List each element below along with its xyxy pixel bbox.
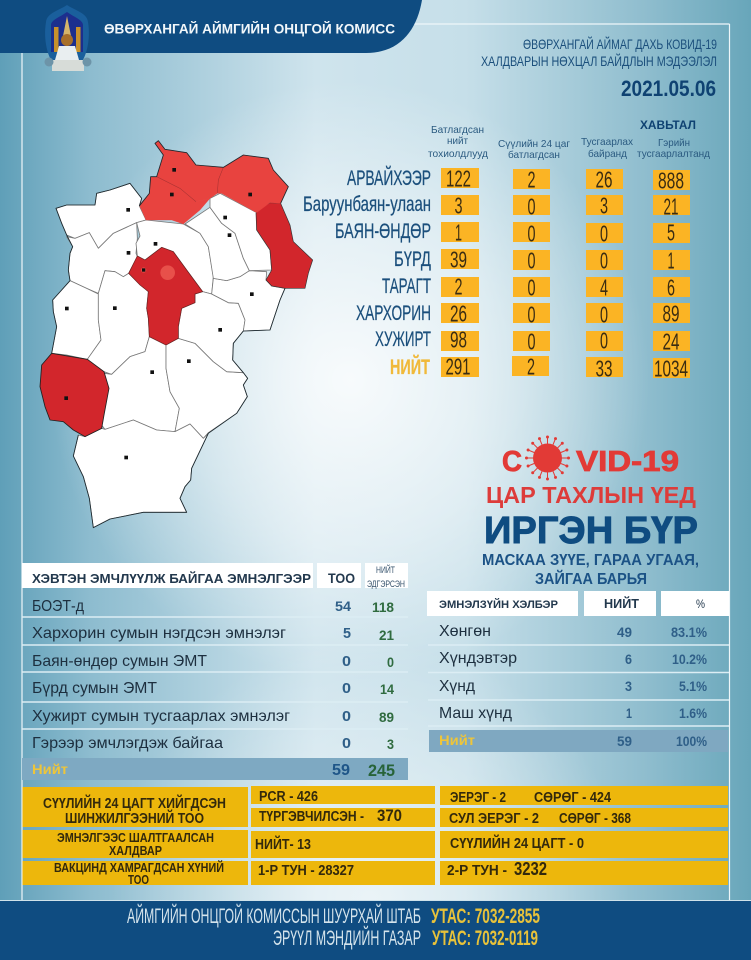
row: vaccination [22, 859, 728, 887]
row: Arvaikheer: 26 [596, 166, 612, 192]
header banner [0, 0, 422, 71]
row: Khujirt isolation hospital: 0 [342, 708, 351, 725]
slogan text: МАСКАА ЗҮҮЕ, ГАРАА УГААЯ, [482, 552, 699, 569]
row: Bayan-Ondor: 0 [600, 220, 608, 246]
row: home treatment: 0 [342, 735, 351, 752]
row: moderate: 10.2% [672, 651, 707, 667]
banner title: ӨВӨРХАНГАЙ АЙМГИЙН ОНЦГОЙ КОМИСС [104, 22, 395, 36]
column headers: батлагдсан [508, 149, 560, 161]
outer border [52, 141, 288, 528]
icon: provincial emblem [44, 5, 92, 71]
contact: health department: ЭРҮҮЛ МЭНДИЙН ГАЗАР [273, 926, 421, 950]
row: Khujirt: 0 [528, 328, 536, 354]
panel: soum case table [303, 120, 710, 382]
table header: ЭМНЭЛЗҮЙН ХЭЛБЭР [439, 598, 558, 611]
row: Kharkhorin hospital: 5 [343, 625, 351, 642]
row: severe: Хүнд [439, 678, 476, 695]
row: Taragt: 2 [454, 274, 462, 300]
column headers: Тусгаарлах [581, 136, 634, 148]
contact: health department: УТАС: 7032-0119 [432, 927, 538, 950]
row: total [390, 354, 690, 382]
row: vaccination: ТОО [128, 872, 149, 887]
row: Kharkhorin: 0 [528, 302, 536, 328]
row: severe: 5.1% [679, 678, 707, 694]
row: Bayan-Ondor: 1 [455, 220, 462, 246]
table header [22, 563, 408, 589]
row: mild: 83.1% [671, 624, 707, 640]
row: vaccination: ВАКЦИНД ХАМРАГДСАН ХҮНИЙ [54, 860, 224, 875]
row: BOET: БОЭТ-д [32, 598, 85, 615]
heading: COVID-19: VID-19 [576, 446, 679, 478]
column headers: Гэрийн [658, 137, 690, 149]
row: hospital-acquired infection [22, 830, 728, 858]
heading: during the pandemic: ЦАР ТАХЛЫН ҮЕД [486, 482, 696, 508]
column headers: Сүүлийн 24 цаг [498, 138, 570, 150]
row: Bayan-Ondor health centre [32, 653, 394, 670]
table header [427, 591, 729, 616]
column headers [428, 120, 710, 161]
row: tests in 24 hours [22, 786, 728, 827]
covid slogan [482, 437, 699, 588]
column headers: тохиолдлууд [428, 148, 488, 160]
row: tests in 24 hours: 370 [377, 806, 402, 825]
row: Baruunbayan-ulaan [303, 192, 690, 220]
row: BOET [32, 598, 394, 615]
soum centre markers [64, 168, 254, 459]
row: Burd health centre [32, 680, 394, 697]
row: very severe: 1 [626, 705, 632, 721]
row: Arvaikheer: 888 [658, 168, 684, 194]
row: total: 291 [446, 354, 470, 380]
row: vaccination: 1-Р ТУН - 28327 [258, 863, 354, 879]
heading: COVID-19 [502, 437, 679, 479]
row: total: Нийт [439, 732, 475, 748]
row: Burd: 0 [600, 248, 608, 274]
row: Baruunbayan-ulaan: 3 [600, 192, 608, 218]
row: Burd health centre: Бүрд сумын ЭМТ [32, 680, 157, 697]
row: Taragt: 6 [667, 274, 675, 300]
row: Taragt: 0 [528, 274, 536, 300]
row: tests in 24 hours: PCR - 426 [259, 789, 318, 805]
row: Taragt: ТАРАГТ [382, 275, 431, 298]
row: Khujirt: 24 [662, 328, 680, 354]
row: Bayan-Ondor health centre: Баян-өндөр сумын ЭМТ [32, 653, 207, 670]
row: Baruunbayan-ulaan: 0 [528, 194, 536, 220]
row: Kharkhorin hospital [32, 625, 394, 643]
row: Kharkhorin hospital: Хархорин сумын нэгдсэн эмнэлэг [32, 625, 286, 642]
row: Burd [394, 246, 690, 274]
row: tests in 24 hours: СУЛ ЭЕРЭГ - 2 [449, 811, 539, 827]
row: moderate: Хүндэвтэр [439, 650, 517, 667]
contact: emergency headquarters: УТАС: 7032-2855 [431, 905, 540, 928]
column headers: Батлагдсан [431, 124, 484, 136]
slogan text [482, 552, 699, 588]
row: Baruunbayan-ulaan: 21 [664, 194, 678, 220]
row: home treatment [32, 735, 394, 752]
row: Khujirt isolation hospital: Хужирт сумын тусгаарлах эмнэлэг [32, 708, 290, 725]
row: Arvaikheer: 2 [528, 166, 536, 192]
row: hospital-acquired infection: ЭМНЭЛГЭЭС ШАЛТГААЛСАН [57, 830, 214, 845]
row: total: 245 [368, 761, 395, 780]
heading: every citizen: ИРГЭН БҮР [484, 510, 698, 552]
row: Burd: БҮРД [394, 248, 431, 271]
row: total: Нийт [32, 761, 68, 777]
contact: emergency headquarters: АЙМГИЙН ОНЦГОЙ КОМИССЫН ШУУРХАЙ ШТАБ [127, 904, 421, 928]
highlighted soums [40, 141, 313, 437]
row: Arvaikheer [347, 166, 690, 194]
row: Kharkhorin: 89 [662, 300, 680, 326]
row: Bayan-Ondor: 0 [528, 220, 536, 246]
row: Burd: 1 [668, 248, 674, 274]
row: Bayan-Ondor health centre: 0 [342, 653, 351, 670]
table header: НИЙТ [604, 596, 639, 611]
row: mild [439, 623, 707, 640]
row: very severe [439, 705, 707, 722]
row: Burd health centre: 14 [380, 681, 394, 697]
map of soums [40, 141, 313, 528]
table header: ТОО [328, 570, 355, 586]
row: total: 33 [596, 356, 612, 382]
icon: virus [526, 437, 568, 479]
row: BOET: 54 [335, 598, 351, 614]
row: total: 59 [332, 762, 350, 779]
panel: testing and vaccination table [22, 786, 728, 887]
slogan text: ЗАЙГАА БАРЬЯ [535, 569, 647, 588]
row: total: 2 [527, 354, 535, 380]
row: Arvaikheer: 122 [446, 166, 471, 192]
panel: clinical form table [427, 591, 729, 752]
row: Khujirt: 0 [600, 328, 608, 354]
row: hospital-acquired infection: СҮҮЛИЙН 24 ЦАГТ - 0 [450, 834, 584, 852]
row: Baruunbayan-ulaan: Баруунбаян-улаан [303, 193, 431, 216]
row: Baruunbayan-ulaan: 3 [454, 192, 462, 218]
panel: hospital table [22, 563, 408, 780]
report title [481, 35, 717, 69]
row: mild: 49 [617, 624, 632, 640]
row: tests in 24 hours: СҮҮЛИЙН 24 ЦАГТ ХИЙГДСЭН [43, 794, 226, 812]
row: severe [439, 678, 707, 695]
row: total [22, 758, 408, 780]
row: Khujirt [375, 326, 690, 354]
row: BOET: 118 [372, 599, 394, 615]
row: severe: 3 [625, 678, 632, 694]
row: home treatment: 3 [387, 736, 394, 752]
row: Khujirt isolation hospital: 89 [379, 709, 394, 725]
table header: ЭДГЭРСЭН [367, 579, 405, 589]
row: Taragt [382, 274, 690, 300]
row: Arvaikheer: АРВАЙХЭЭР [347, 166, 431, 190]
row: total: 59 [617, 733, 632, 749]
row: tests in 24 hours: ШИНЖИЛГЭЭНИЙ ТОО [65, 809, 204, 827]
row: total: НИЙТ [390, 355, 430, 379]
row: vaccination: 2-Р ТУН - [447, 863, 507, 879]
row: total: 1034 [654, 356, 688, 382]
column headers: нийт [447, 135, 468, 147]
column headers: ХАВЬТАЛ [640, 120, 696, 132]
footer contact bar [0, 900, 751, 960]
row: Burd health centre: 0 [342, 680, 351, 697]
row: Bayan-Ondor: БАЯН-ӨНДӨР [335, 220, 431, 243]
row: tests in 24 hours: ТҮРГЭВЧИЛСЭН - [259, 809, 364, 825]
row: very severe: Маш хүнд [439, 705, 513, 722]
row: Kharkhorin: ХАРХОРИН [356, 302, 431, 325]
row: tests in 24 hours: СӨРӨГ - 368 [559, 811, 631, 827]
row: Bayan-Ondor [335, 220, 690, 246]
column headers: байранд [588, 148, 627, 160]
column headers: тусгаарлалтанд [637, 148, 710, 160]
report date: 2021.05.06 [621, 76, 716, 101]
row: Bayan-Ondor: 5 [667, 220, 675, 246]
row: mild: Хөнгөн [439, 623, 491, 640]
row: Burd: 39 [450, 246, 467, 272]
row: tests in 24 hours: ЭЕРЭГ - 2 [450, 790, 506, 806]
row: Khujirt: ХУЖИРТ [375, 328, 431, 351]
row: moderate: 6 [625, 651, 632, 667]
row: Kharkhorin hospital: 21 [379, 627, 394, 643]
heading: COVID-19: C [502, 446, 522, 478]
row: Bayan-Ondor health centre: 0 [387, 654, 394, 670]
row: Khujirt: 98 [450, 326, 467, 352]
row: Kharkhorin: 26 [450, 300, 467, 326]
table header: % [696, 597, 705, 611]
row: hospital-acquired infection: ХАЛДВАР [109, 843, 162, 858]
row: Kharkhorin [356, 300, 690, 328]
row: Taragt: 4 [600, 274, 608, 300]
row: very severe: 1.6% [679, 705, 707, 721]
row: Burd: 0 [528, 248, 536, 274]
row: tests in 24 hours: СӨРӨГ - 424 [534, 790, 611, 806]
table header: НИЙТ [376, 564, 395, 575]
row: Kharkhorin: 0 [600, 302, 608, 328]
row: moderate [439, 650, 707, 667]
table header: ХЭВТЭН ЭМЧЛҮҮЛЖ БАЙГАА ЭМНЭЛГЭЭР [32, 571, 311, 586]
row: total: 100% [676, 733, 707, 749]
row: home treatment: Гэрээр эмчлэгдэж байгаа [32, 735, 223, 752]
row: hospital-acquired infection: НИЙТ- 13 [255, 835, 311, 853]
row: total [429, 730, 728, 752]
row: vaccination: 3232 [514, 859, 547, 879]
